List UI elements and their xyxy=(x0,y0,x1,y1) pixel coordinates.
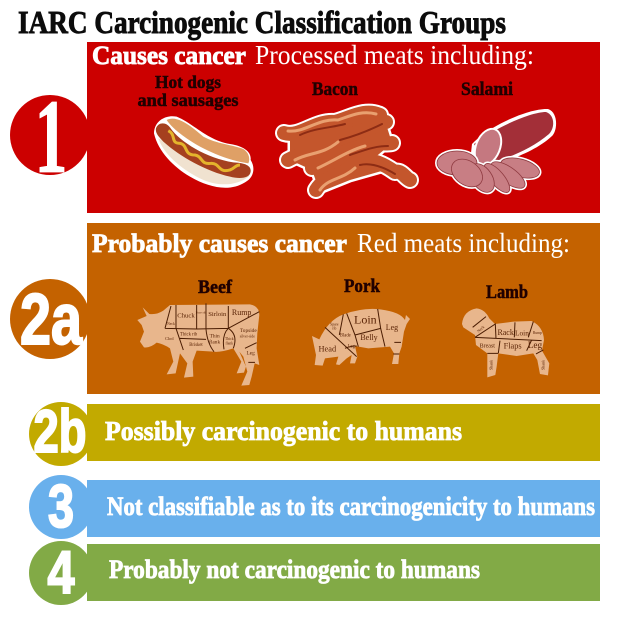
badge: group 3: 3 xyxy=(48,473,74,540)
panel: group 3 xyxy=(29,473,600,540)
heading: causes cancer: Causes cancer xyxy=(92,41,246,70)
icon: beef cuts: Rump xyxy=(232,308,251,317)
icon: lamb cuts: Rack xyxy=(497,328,514,337)
text: probably not carcinogenic: Probably not carcinogenic to humans xyxy=(109,555,480,584)
icon: beef cuts: Neck xyxy=(167,322,175,326)
panel: group 4 xyxy=(29,539,600,606)
panel background: group 1 xyxy=(87,42,600,213)
badge: group 3 xyxy=(29,473,93,540)
badge: group 2b: 2b xyxy=(34,398,86,465)
icon: pork cuts: rib xyxy=(332,327,337,331)
panel fill: group 3 xyxy=(87,480,600,537)
subheading: red meats: Red meats including: xyxy=(357,228,570,258)
icon: beef cuts: Topside xyxy=(240,328,257,334)
panel: group 2a probably causes cancer xyxy=(10,223,600,394)
icon: beef cuts: silver-side xyxy=(240,334,255,338)
icon: beef cuts: Clod xyxy=(165,336,174,341)
label: salami: Salami xyxy=(461,79,513,100)
icon: beef cuts: flank xyxy=(226,341,233,345)
icon: lamb cuts: Breast xyxy=(480,343,495,349)
icon: beef cuts xyxy=(137,303,259,386)
label: hot dogs and sausages: and sausages xyxy=(138,90,238,110)
label: bacon: Bacon xyxy=(312,79,358,100)
badge: group 1 xyxy=(10,78,90,195)
panel background: group 2b xyxy=(87,404,600,461)
panel background: group 4 xyxy=(87,544,600,601)
icon: beef cuts: Thick rib xyxy=(180,333,198,338)
icon: salami xyxy=(437,109,556,197)
icon: bacon xyxy=(284,112,410,192)
icon: hot dog xyxy=(154,116,253,188)
icon: pork cuts: Loin xyxy=(354,312,377,326)
icon: pork cuts: Blade xyxy=(340,334,351,339)
icon: lamb cuts: Flaps xyxy=(504,341,522,350)
icon: pork cuts: Leg xyxy=(386,323,398,332)
label: pork: Pork xyxy=(344,276,380,297)
icon: lamb cuts: Shank xyxy=(489,360,494,370)
badge: group 2a: 2a xyxy=(20,280,83,360)
icon: pork cuts: Belly xyxy=(360,333,378,342)
badge: group 4: 4 xyxy=(48,539,75,606)
icon: pork cuts: Spare xyxy=(330,322,339,326)
label: beef: Beef xyxy=(198,277,233,298)
icon: beef cuts: flank xyxy=(209,338,220,345)
icon: beef cuts: Thin xyxy=(210,333,220,339)
icon: beef cuts: Chuck xyxy=(177,313,195,320)
text: possibly carcinogenic: Possibly carcinogenic to humans xyxy=(105,416,462,446)
icon: lamb cuts: Neck xyxy=(476,324,485,334)
icon: beef cuts: Leg xyxy=(246,350,255,356)
label: hot dogs and sausages xyxy=(138,72,238,110)
icon: beef cuts: Thick xyxy=(225,337,234,341)
icon: pork cuts xyxy=(312,309,410,366)
heading: probably causes cancer: Probably causes cancer xyxy=(92,229,347,258)
label: hot dogs and sausages: Hot dogs xyxy=(155,72,221,92)
icon: lamb cuts: Leg xyxy=(528,341,543,351)
panel background: group 2a xyxy=(87,223,600,394)
icon: beef cuts: Sirloin xyxy=(208,311,227,318)
icon: beef cuts: Fore rib xyxy=(196,310,207,314)
icon: lamb cuts: Rump xyxy=(533,331,542,335)
panel: group 2b xyxy=(29,398,600,466)
title: IARC Carcinogenic Classification Groups xyxy=(18,4,506,40)
panel: group 1 causes cancer xyxy=(10,40,600,213)
icon: pork cuts: Leg xyxy=(348,345,356,350)
icon: beef cuts: Brisket xyxy=(189,343,203,348)
badge: group 4 xyxy=(29,539,93,606)
badge: group 1: 1 xyxy=(34,78,68,195)
icon: lamb cuts xyxy=(462,308,549,377)
icon: pork cuts: Head xyxy=(319,345,337,354)
icon: lamb cuts: Loin xyxy=(515,328,529,337)
icon: lamb cuts: Shank xyxy=(540,360,545,370)
label: lamb: Lamb xyxy=(486,282,528,303)
subheading: processed meats: Processed meats including: xyxy=(255,40,534,70)
